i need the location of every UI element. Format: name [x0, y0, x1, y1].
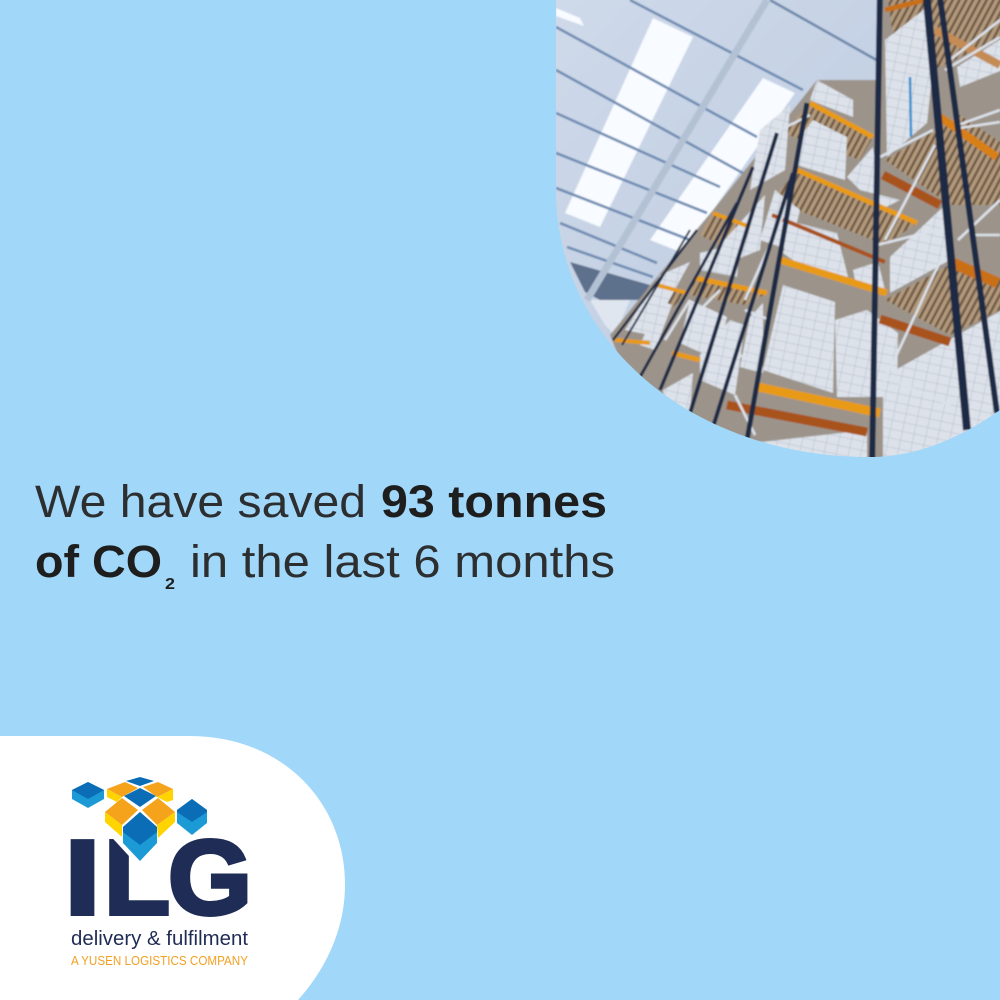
headline: CO2 savings statement [35, 476, 615, 593]
orange shelf beams [615, 0, 1000, 413]
ceiling dark far end [570, 262, 650, 300]
logo wordmark: ILG [64, 818, 252, 937]
logo icon: stacked blue and orange cubes [72, 770, 207, 868]
headline: CO2 savings statement: in the last 6 months [190, 536, 615, 587]
logo sub-tagline: A YUSEN LOGISTICS COMPANY [71, 953, 248, 968]
blue strap on pallet [910, 77, 911, 137]
headline: CO2 savings statement: of CO [35, 536, 162, 587]
ceiling [556, 0, 878, 351]
headline: CO2 savings statement: 93 tonnes [381, 476, 607, 527]
dark rack uprights [613, 0, 997, 470]
logo wordmark: ILG: L [104, 818, 170, 937]
logo tagline: delivery & fulfilment [71, 928, 248, 950]
rack backdrop [610, 0, 1000, 470]
logo panel: white rounded corner shape [0, 736, 345, 1000]
white diagonal braces [665, 20, 1000, 435]
headline: CO2 savings statement: 2 [165, 576, 175, 593]
photo: warehouse racking in rounded blob [540, 0, 1000, 470]
logo wordmark: ILG: G [168, 818, 252, 937]
logo wordmark: ILG: I [64, 819, 101, 937]
main diagonal ceiling girder [587, 0, 767, 300]
headline: CO2 savings statement: We have saved [35, 476, 366, 527]
rust shelf undersides [727, 175, 950, 432]
logo: ILG delivery and fulfilment [64, 770, 252, 968]
slatted shelf decks [650, 0, 1000, 335]
ceiling cross beams [556, 0, 880, 277]
pallets of wrapped boxes [625, 7, 1000, 470]
ceiling light strips [556, 8, 795, 253]
